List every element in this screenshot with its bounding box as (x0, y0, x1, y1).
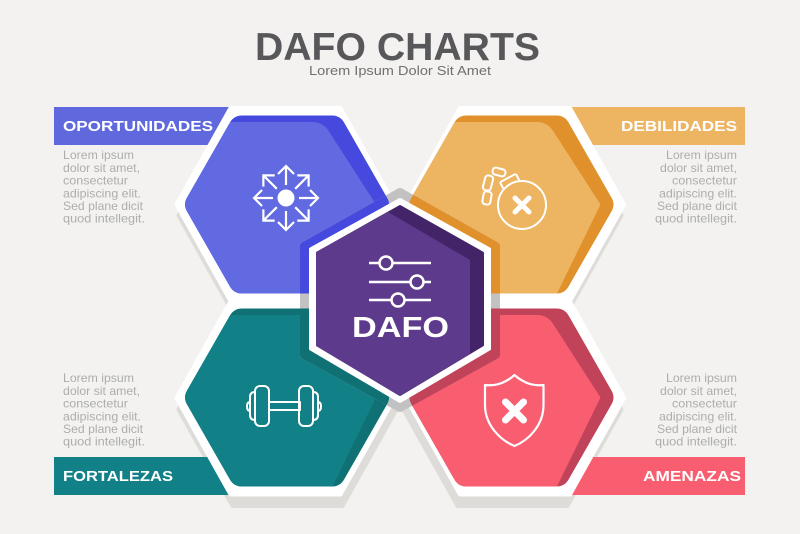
text block: oportunidades: Sed plane dicit (63, 199, 144, 213)
centre label: DAFO (352, 312, 449, 344)
text block: amenazas: quod intellegit. (655, 434, 737, 448)
ribbon: oportunidades: OPORTUNIDADES (63, 118, 213, 135)
icon: arrows radiating from a centre (254, 166, 318, 230)
text block: fortalezas (63, 371, 145, 448)
hexagon white borders (176, 108, 624, 494)
ribbon: amenazas (566, 457, 745, 495)
text block: oportunidades (63, 148, 145, 226)
panel: amenazas hexagon (392, 308, 614, 488)
icon: dumbbell (247, 386, 321, 426)
text block: fortalezas: adipiscing elit. (63, 410, 141, 424)
ribbon: amenazas: AMENAZAS (643, 468, 741, 485)
text block: fortalezas: dolor sit amet, (63, 384, 140, 398)
title: DAFO CHARTS (255, 26, 540, 69)
ribbon: oportunidades (54, 107, 234, 145)
text block: amenazas: Lorem ipsum (666, 371, 737, 385)
subtitle: Lorem Ipsum Dolor Sit Amet (309, 63, 491, 78)
icon: shield with cross (485, 375, 544, 446)
icon: sliders (369, 256, 431, 306)
ribbon: debilidades (566, 107, 745, 145)
text block: amenazas: adipiscing elit. (659, 410, 737, 424)
text block: oportunidades: Lorem ipsum (63, 148, 134, 162)
text block: amenazas: consectetur (672, 396, 737, 410)
centre hexagon halo (304, 192, 496, 408)
text block: amenazas (655, 371, 738, 448)
text block: fortalezas: Lorem ipsum (63, 371, 134, 385)
text block: oportunidades: dolor sit amet, (63, 161, 140, 175)
text block: oportunidades: quod intellegit. (63, 212, 145, 226)
panel: oportunidades hexagon (167, 116, 389, 294)
panel: fortalezas hexagon (167, 308, 389, 488)
panel: centre DAFO hexagon (310, 200, 490, 402)
ribbon: debilidades: DEBILIDADES (621, 118, 737, 135)
text block: debilidades: Lorem ipsum (666, 148, 737, 162)
text block: debilidades: quod intellegit. (655, 212, 737, 226)
hexagon drop shadows (178, 119, 622, 506)
text block: fortalezas: quod intellegit. (63, 434, 145, 448)
text block: debilidades: Sed plane dicit (657, 199, 738, 213)
panel: debilidades hexagon (413, 116, 614, 294)
ribbon: fortalezas (54, 457, 234, 495)
text block: debilidades (655, 148, 738, 226)
text block: fortalezas: consectetur (63, 396, 128, 410)
text block: amenazas: dolor sit amet, (660, 384, 737, 398)
text block: debilidades: dolor sit amet, (660, 161, 737, 175)
ribbon: fortalezas: FORTALEZAS (63, 468, 173, 485)
text block: debilidades: adipiscing elit. (659, 186, 737, 200)
text block: debilidades: consectetur (672, 174, 737, 188)
text block: amenazas: Sed plane dicit (657, 422, 738, 436)
text block: fortalezas: Sed plane dicit (63, 422, 144, 436)
text block: oportunidades: adipiscing elit. (63, 186, 141, 200)
text block: oportunidades: consectetur (63, 174, 128, 188)
icon: ball and chain with cross (482, 167, 546, 229)
